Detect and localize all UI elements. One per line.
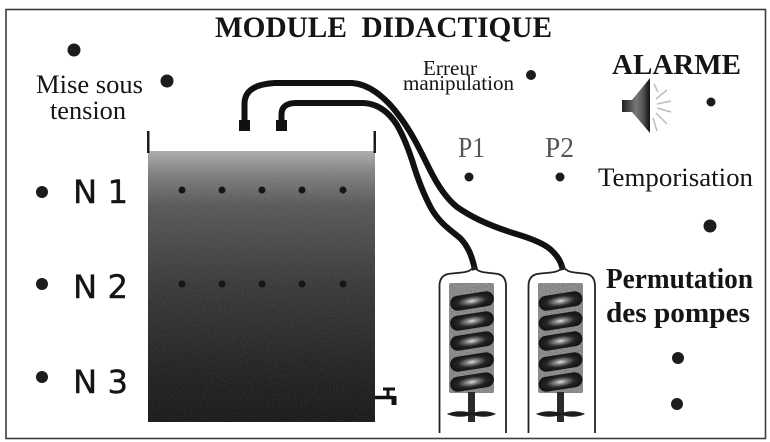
pump 1	[440, 266, 506, 433]
label: temporisation: Temporisation	[598, 162, 753, 192]
indicator: erreur manipulation	[526, 70, 536, 80]
level N2: N 2	[73, 268, 128, 306]
hose to pump 2	[239, 83, 563, 270]
indicator: temporisation	[704, 220, 716, 232]
tap	[375, 389, 395, 405]
level N1: N 1	[73, 173, 128, 211]
label: mise sous tension: tension	[50, 95, 126, 125]
label: permutation des pompes: Permutation	[606, 264, 753, 295]
tank	[147, 131, 376, 422]
title: MODULE DIDACTIQUE	[215, 12, 552, 44]
level N3: N 3	[73, 363, 128, 401]
level N1	[36, 173, 128, 211]
indicator: mise sous tension top	[68, 44, 80, 56]
label: erreur manipulation: manipulation	[403, 71, 514, 95]
level N3	[36, 363, 128, 401]
indicator: P1	[464, 172, 474, 182]
indicator: permutation 2	[671, 398, 683, 410]
sensor row N2	[178, 280, 346, 288]
indicator: mise sous tension right	[160, 74, 174, 88]
level N2	[36, 268, 128, 306]
icon: horn	[622, 78, 671, 133]
indicator: P2	[556, 172, 564, 182]
label: P1: P1	[458, 132, 485, 164]
sensor row N1	[178, 186, 346, 194]
hose to pump 1	[276, 103, 475, 270]
label: erreur manipulation: Erreur	[423, 56, 477, 80]
pump 2	[528, 266, 595, 433]
label: P2: P2	[545, 132, 574, 164]
label: permutation des pompes: des pompes	[606, 298, 750, 329]
label: alarme: ALARME	[612, 49, 741, 81]
label: mise sous tension: Mise sous	[36, 69, 143, 99]
indicator: alarme	[706, 98, 716, 106]
indicator: permutation 1	[672, 352, 684, 364]
